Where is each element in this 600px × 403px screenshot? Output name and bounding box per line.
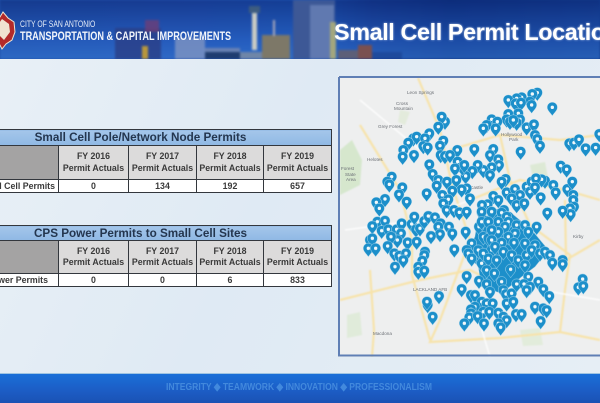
column headers bbox=[0, 241, 331, 273]
footer values text: INTEGRITY ◆ TEAMWORK ◆ INNOVATION ◆ PROFESSIONALISM bbox=[166, 381, 432, 393]
map pins: southern half bbox=[363, 207, 588, 336]
data row: 657 bbox=[290, 181, 305, 191]
table: CPS power permits bbox=[0, 225, 332, 287]
column headers: Permit Actuals bbox=[199, 257, 261, 267]
department name: TRANSPORTATION & CAPITAL IMPROVEMENTS bbox=[20, 31, 231, 43]
data row: 192 bbox=[223, 181, 237, 191]
map place labels: Mountain bbox=[394, 106, 413, 111]
footer band bbox=[0, 373, 600, 403]
table heading: Small Cell Pole/Network Node Permits bbox=[35, 131, 246, 144]
column headers: Permit Actuals bbox=[132, 257, 193, 267]
data row: 0 bbox=[91, 181, 96, 191]
organisation name: CITY OF SAN ANTONIO bbox=[20, 19, 95, 29]
map panel bbox=[338, 76, 600, 357]
column headers: FY 2017 bbox=[146, 246, 179, 256]
column headers: FY 2019 bbox=[281, 246, 314, 256]
map place labels: Leon Springs bbox=[407, 90, 435, 95]
table heading: CPS Power Permits to Small Cell Sites bbox=[34, 226, 247, 240]
table heading bbox=[0, 226, 331, 286]
table heading bbox=[0, 130, 331, 192]
column headers: FY 2016 bbox=[77, 151, 110, 161]
map place labels: Forest bbox=[341, 166, 355, 171]
column headers: Permit Actuals bbox=[63, 257, 124, 267]
data row bbox=[0, 274, 331, 286]
data row: 0 bbox=[91, 275, 96, 285]
header banner bbox=[0, 0, 600, 59]
column headers: Permit Actuals bbox=[63, 162, 124, 172]
column headers: FY 2018 bbox=[213, 151, 247, 161]
map place labels: LACKLAND AFB bbox=[413, 287, 447, 292]
map place labels: State bbox=[345, 172, 356, 177]
data row bbox=[0, 180, 331, 192]
data row: 0 bbox=[160, 275, 165, 285]
column headers: Permit Actuals bbox=[267, 257, 328, 267]
map base: parks and roads bbox=[340, 78, 600, 357]
column headers: Permit Actuals bbox=[132, 162, 193, 172]
column headers: FY 2017 bbox=[146, 151, 179, 161]
map place labels: Park bbox=[509, 137, 519, 142]
column headers: Permit Actuals bbox=[267, 162, 328, 172]
column headers: Permit Actuals bbox=[199, 162, 261, 172]
map place labels: Hollywood bbox=[501, 132, 523, 137]
map place labels bbox=[341, 90, 584, 336]
column headers: FY 2016 bbox=[77, 246, 110, 256]
data row: 134 bbox=[155, 181, 170, 191]
map frame bbox=[339, 77, 600, 356]
column headers: FY 2019 bbox=[281, 151, 314, 161]
data row: 6 bbox=[228, 275, 232, 285]
table: small cell pole permits bbox=[0, 129, 332, 193]
column headers bbox=[0, 146, 331, 179]
logo bbox=[0, 11, 16, 50]
map place labels: Helotes bbox=[367, 157, 383, 162]
map place labels: Area bbox=[346, 177, 356, 182]
map place labels: Macdona bbox=[373, 331, 392, 336]
map pins bbox=[371, 88, 600, 225]
column headers: FY 2018 bbox=[213, 246, 247, 256]
data row: 833 bbox=[290, 275, 305, 285]
map place labels: Grey Forest bbox=[378, 124, 403, 129]
map place labels: Cross bbox=[396, 101, 409, 106]
map place labels: Kirby bbox=[573, 234, 584, 239]
skyline bbox=[0, 0, 600, 59]
map place labels: Castle bbox=[470, 185, 483, 190]
